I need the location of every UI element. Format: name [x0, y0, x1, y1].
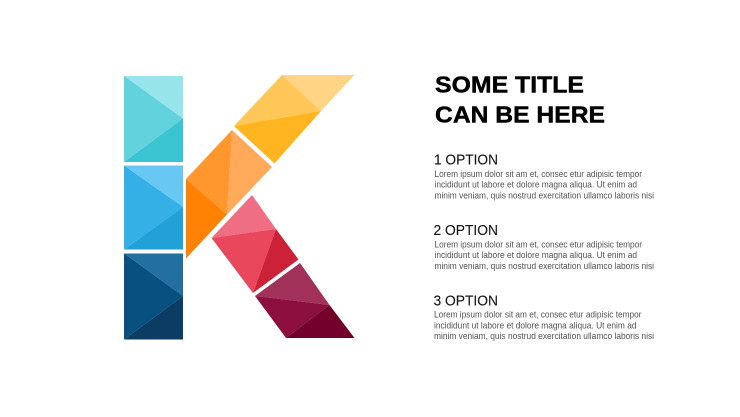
option 1 body text: [434, 168, 654, 200]
option 1 body text: minim veniam, quis nostrud exercitation ullamco laboris nisi: [434, 190, 654, 200]
option 1 body text: Lorem ipsum dolor sit am et, consec etur adipisic tempor: [434, 168, 642, 179]
block: navy: [124, 254, 183, 340]
option 3 heading: 3 OPTION: [434, 294, 498, 310]
option 3 body text: minim veniam, quis nostrud exercitation ullamco laboris nisi: [434, 330, 654, 341]
option 2 body text: Lorem ipsum dolor sit am et, consec etur adipisic tempor: [434, 238, 642, 250]
option 1 body text: incididunt ut labore et dolore magna aliqua. Ut enim ad: [434, 178, 637, 190]
option 3 body text: [434, 308, 654, 341]
block: red: [212, 195, 298, 293]
block: yellow: [234, 75, 354, 164]
option 2 body text: [434, 238, 654, 271]
option 2 heading: 2 OPTION: [434, 223, 498, 239]
option 2 body text: incididunt ut labore et dolore magna aliqua. Ut enim ad: [434, 249, 637, 260]
option 2: [434, 223, 654, 271]
option 3 body text: incididunt ut labore et dolore magna aliqua. Ut enim ad: [434, 320, 636, 330]
title: [435, 72, 605, 128]
option 3: [434, 294, 654, 341]
block: teal: [124, 76, 183, 162]
block: light blue: [124, 166, 183, 250]
option 3 body text: Lorem ipsum dolor sit am et, consec etur adipisic tempor: [434, 308, 642, 320]
block: orange: [186, 130, 272, 258]
option 1 heading: 1 OPTION: [434, 152, 498, 168]
letter K graphic: [124, 75, 354, 340]
option 1: [434, 152, 654, 200]
title: SOME TITLE: [435, 72, 584, 98]
block: maroon: [255, 263, 354, 338]
title: CAN BE HERE: [435, 102, 605, 128]
option 2 body text: minim veniam, quis nostrud exercitation ullamco laboris nisi: [434, 260, 654, 271]
